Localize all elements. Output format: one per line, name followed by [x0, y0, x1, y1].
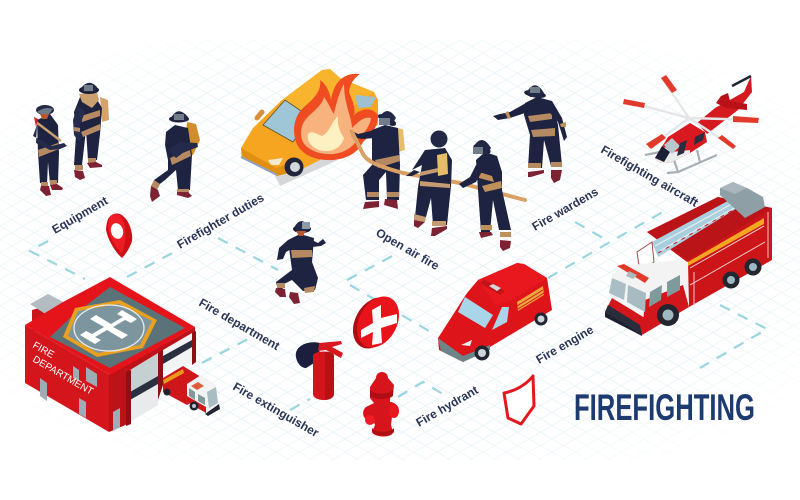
- dashed flow connectors: [30, 209, 767, 410]
- label: Fire engine: Fire engine: [534, 322, 596, 367]
- label: Fire extinguisher: Fire extinguisher: [230, 379, 322, 440]
- hose team: firefighter from behind: [406, 130, 452, 236]
- small fire engine leaving station: [163, 366, 220, 416]
- icon: fire hydrant: [363, 372, 399, 436]
- firefighter carrying child: [150, 111, 200, 202]
- fire station building: [25, 277, 196, 432]
- running firefighter: [275, 221, 326, 304]
- label: Fire department: Fire department: [196, 295, 282, 353]
- building sign: FIRE: [30, 340, 56, 361]
- burning car: [241, 69, 378, 186]
- label: Equipment: Equipment: [50, 193, 110, 237]
- fire engine truck: [605, 182, 772, 336]
- fire hose: [352, 132, 525, 200]
- icon: fire extinguisher: [296, 341, 343, 400]
- fire van: [438, 263, 552, 362]
- label: Firefighter duties: Firefighter duties: [174, 190, 267, 252]
- flame on car: [294, 74, 378, 160]
- hose team: firefighter at nozzle: [350, 111, 405, 209]
- icon: shield: [504, 376, 534, 424]
- helicopter: [623, 75, 759, 173]
- label: Firefighting aircraft: Firefighting aircraft: [598, 142, 701, 210]
- firefighter pointing, fire warden: [493, 85, 567, 183]
- label: Fire hydrant: Fire hydrant: [414, 383, 481, 430]
- building sign: DEPARTMENT: [30, 354, 95, 398]
- label: Open air fire: Open air fire: [374, 225, 442, 273]
- hose team: rear firefighter: [459, 140, 511, 251]
- firefighter with air tank: [73, 83, 109, 180]
- label: Fire wardens: Fire wardens: [530, 184, 601, 234]
- icon: medical cross badge: [345, 289, 407, 356]
- firefighter with axe: [33, 105, 67, 196]
- icon: location pin: [106, 213, 132, 258]
